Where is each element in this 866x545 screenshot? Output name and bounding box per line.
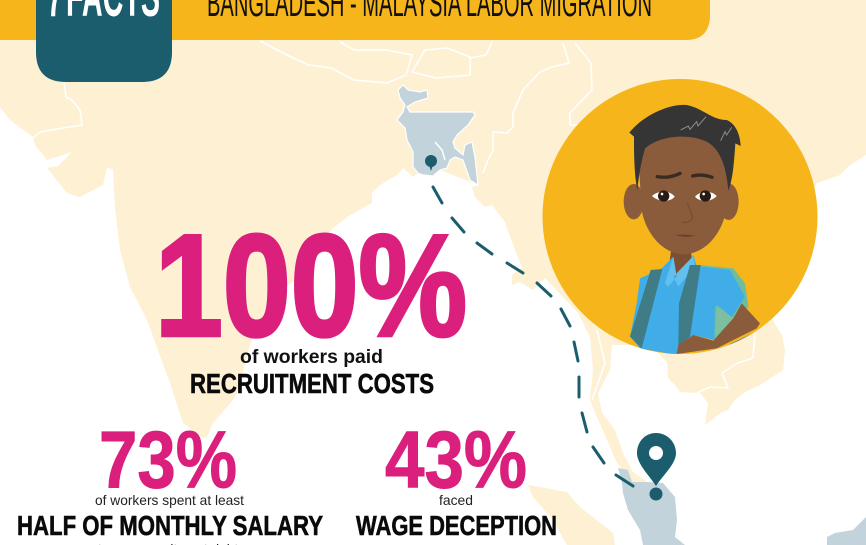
stat: 73 percent [17,416,323,545]
stat: 43 percent [356,416,557,541]
hair [629,105,741,191]
banner [0,0,710,40]
migration route dashed line [433,187,633,486]
stat emphasis: WAGE DECEPTION [356,510,557,541]
stat caption: of workers paid [240,347,383,368]
face [638,129,730,254]
eyes [652,190,717,202]
stat caption: of workers spent at least [95,492,244,508]
stat emphasis: RECRUITMENT COSTS [190,368,434,399]
map: country borders [33,41,755,400]
stat emphasis: HALF OF MONTHLY SALARY [17,510,323,541]
stat: 43 percent: 43% [385,416,527,506]
backpack [697,265,748,340]
character: worried worker [624,105,760,355]
neck [670,252,692,276]
stat: 73 percent: 73% [99,416,237,506]
shirt [630,255,745,355]
backpack pocket [715,305,733,337]
river estuary [435,142,445,160]
origin pin: Bangladesh [425,155,437,171]
country: Malaysia [618,468,685,545]
left strap [630,269,662,348]
eyebrows [657,173,712,177]
country: Bangladesh [397,85,478,185]
island: Borneo [827,517,866,545]
arm [677,303,760,354]
nose and mouth [682,203,693,222]
stat: 100 percent: 100% [155,204,467,366]
ears [624,183,739,220]
hair highlights [681,117,732,141]
teal badge [36,0,172,82]
stat caption: faced [439,492,473,508]
collar [665,256,695,287]
portrait circle [542,79,818,354]
sleeve shadow [729,333,753,345]
right strap [678,265,701,347]
destination pin: Malaysia [637,433,676,500]
island: Sumatra [528,485,615,545]
